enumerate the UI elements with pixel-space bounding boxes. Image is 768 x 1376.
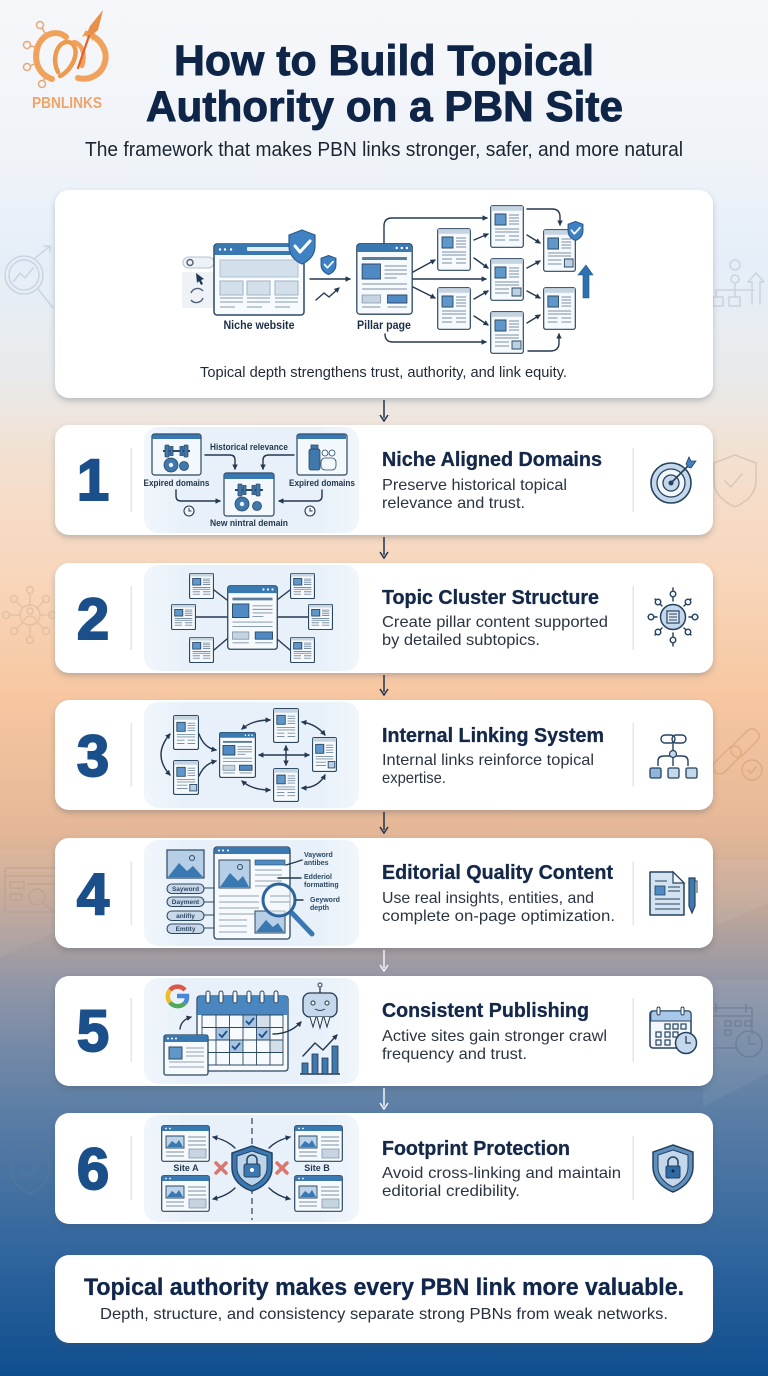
number 5: 5 <box>77 999 109 1064</box>
panel: step 1 niche aligned domains <box>55 425 713 535</box>
icon: link hierarchy <box>650 735 697 778</box>
description: Avoid cross-linking and maintain <box>382 1165 621 1182</box>
illustration: separated sites <box>144 1115 359 1222</box>
description: Use real insights, entities, and <box>382 890 594 907</box>
description: expertise. <box>382 770 446 787</box>
arrow: step 5 to 6 <box>380 1088 388 1109</box>
panel: closing statement <box>55 1255 713 1343</box>
number 6: 6 <box>77 1137 109 1202</box>
description: Create pillar content supported <box>382 614 608 631</box>
illustration: editorial page: anlifiy <box>176 913 195 920</box>
label: pillar page: Pillar page <box>357 320 411 332</box>
arrow: hero to step 1 <box>380 400 388 421</box>
illustration: editorial page: Vayword <box>304 852 333 859</box>
icon: growth zigzag <box>316 288 339 300</box>
title <box>146 37 623 131</box>
illustration: editorial page: Geyword <box>310 897 340 904</box>
heading: Niche Aligned Domains <box>382 449 602 471</box>
icon: calendar clock <box>650 1007 696 1054</box>
heading: Editorial Quality Content <box>382 862 613 884</box>
niche website browser <box>214 244 304 315</box>
background icon: magnifier chart <box>5 246 53 308</box>
illustration: editorial page: Sayword <box>172 886 199 893</box>
hero caption: Topical depth strengthens trust, authority, and link equity. <box>200 364 567 381</box>
illustration: topic cluster <box>144 565 359 671</box>
arrow: step 4 to 5 <box>380 950 388 971</box>
description: relevance and trust. <box>382 495 525 512</box>
background icon: browser search <box>5 868 57 912</box>
number 1: 1 <box>77 448 109 513</box>
arrow: website to pillar <box>310 278 350 280</box>
illustration: editorial page: Edderiol <box>304 874 332 881</box>
illustration: expired domains: Historical relevance <box>210 442 288 452</box>
description: Active sites gain stronger crawl <box>382 1028 607 1045</box>
heading: Internal Linking System <box>382 725 604 747</box>
illustration: separated sites: Site B <box>304 1163 330 1173</box>
illustration: expired domains: Expired domains <box>289 478 355 488</box>
description <box>382 1165 621 1200</box>
panel: step 2 topic cluster structure <box>55 563 713 673</box>
number 4: 4 <box>77 862 109 927</box>
background icon: people hub <box>2 586 56 644</box>
arrow: step 2 to 3 <box>380 675 388 695</box>
description <box>382 752 594 787</box>
illustration: expired domains: Expired domains <box>144 478 210 488</box>
background icon: shield check <box>714 455 756 507</box>
icon: target <box>651 457 696 503</box>
heading: Topic Cluster Structure <box>382 587 599 609</box>
number 2: 2 <box>77 587 109 652</box>
search sidebar <box>182 257 214 308</box>
description <box>382 614 608 649</box>
arrow: step 3 to 4 <box>380 812 388 833</box>
description: frequency and trust. <box>382 1046 527 1063</box>
panel: hero overview <box>55 190 713 398</box>
panel: step 4 editorial quality content <box>55 838 713 948</box>
description <box>382 1028 607 1063</box>
icon: small shield <box>321 256 336 274</box>
icon: small shield on page <box>568 222 583 240</box>
illustration: editorial page <box>144 840 359 946</box>
icon: document and pen <box>650 872 697 915</box>
description: by detailed subtopics. <box>382 632 540 649</box>
description <box>382 890 615 925</box>
background icon: chain link <box>710 726 762 780</box>
icon: large shield <box>289 230 315 264</box>
arrow: step 1 to 2 <box>380 537 388 558</box>
description: Internal links reinforce topical <box>382 752 594 769</box>
description <box>382 477 567 512</box>
heading: Footprint Protection <box>382 1138 570 1160</box>
icon: content hub <box>648 588 698 646</box>
pillar page browser <box>357 244 412 314</box>
illustration: internal links <box>144 702 359 808</box>
illustration: editorial page: formatting <box>304 882 339 889</box>
background icon: flow chart <box>713 260 764 306</box>
closing headline: Topical authority makes every PBN link more valuable. <box>84 1274 684 1301</box>
illustration: expired domains <box>144 427 359 533</box>
panel: step 6 footprint protection <box>55 1113 713 1224</box>
illustration: editorial page: Emtity <box>176 926 196 933</box>
description: complete on-page optimization. <box>382 908 615 925</box>
description: editorial credibility. <box>382 1183 520 1200</box>
illustration: separated sites: Site A <box>173 1163 199 1173</box>
logo: PBNLINKS: PBNLINKS <box>32 95 102 112</box>
number 3: 3 <box>77 724 109 789</box>
illustration: editorial page: antibes <box>304 860 329 867</box>
panel: step 3 internal linking system <box>55 700 713 810</box>
description: Preserve historical topical <box>382 477 567 494</box>
background icon: calendar clock <box>714 1004 762 1057</box>
panel: step 5 consistent publishing <box>55 976 713 1086</box>
illustration: expired domains: New nintral demain <box>210 518 288 528</box>
heading: Consistent Publishing <box>382 1000 589 1022</box>
illustration: editorial page: Dayment <box>172 899 200 906</box>
cluster page documents <box>438 206 575 353</box>
arrows: cluster links <box>384 209 560 351</box>
illustration: publishing calendar <box>144 978 359 1084</box>
illustration: editorial page: depth <box>310 905 329 912</box>
title: How to Build Topical <box>174 37 594 85</box>
icon: shield lock <box>653 1145 693 1192</box>
label: niche website: Niche website <box>224 320 294 332</box>
logo: PBNLINKS <box>24 10 106 112</box>
subtitle: The framework that makes PBN links stronger, safer, and more natural <box>85 139 683 161</box>
arrow: upward growth <box>578 265 593 298</box>
background icon: shield check left <box>11 1145 49 1194</box>
title: Authority on a PBN Site <box>146 83 623 131</box>
closing subline: Depth, structure, and consistency separate strong PBNs from weak networks. <box>100 1306 668 1323</box>
